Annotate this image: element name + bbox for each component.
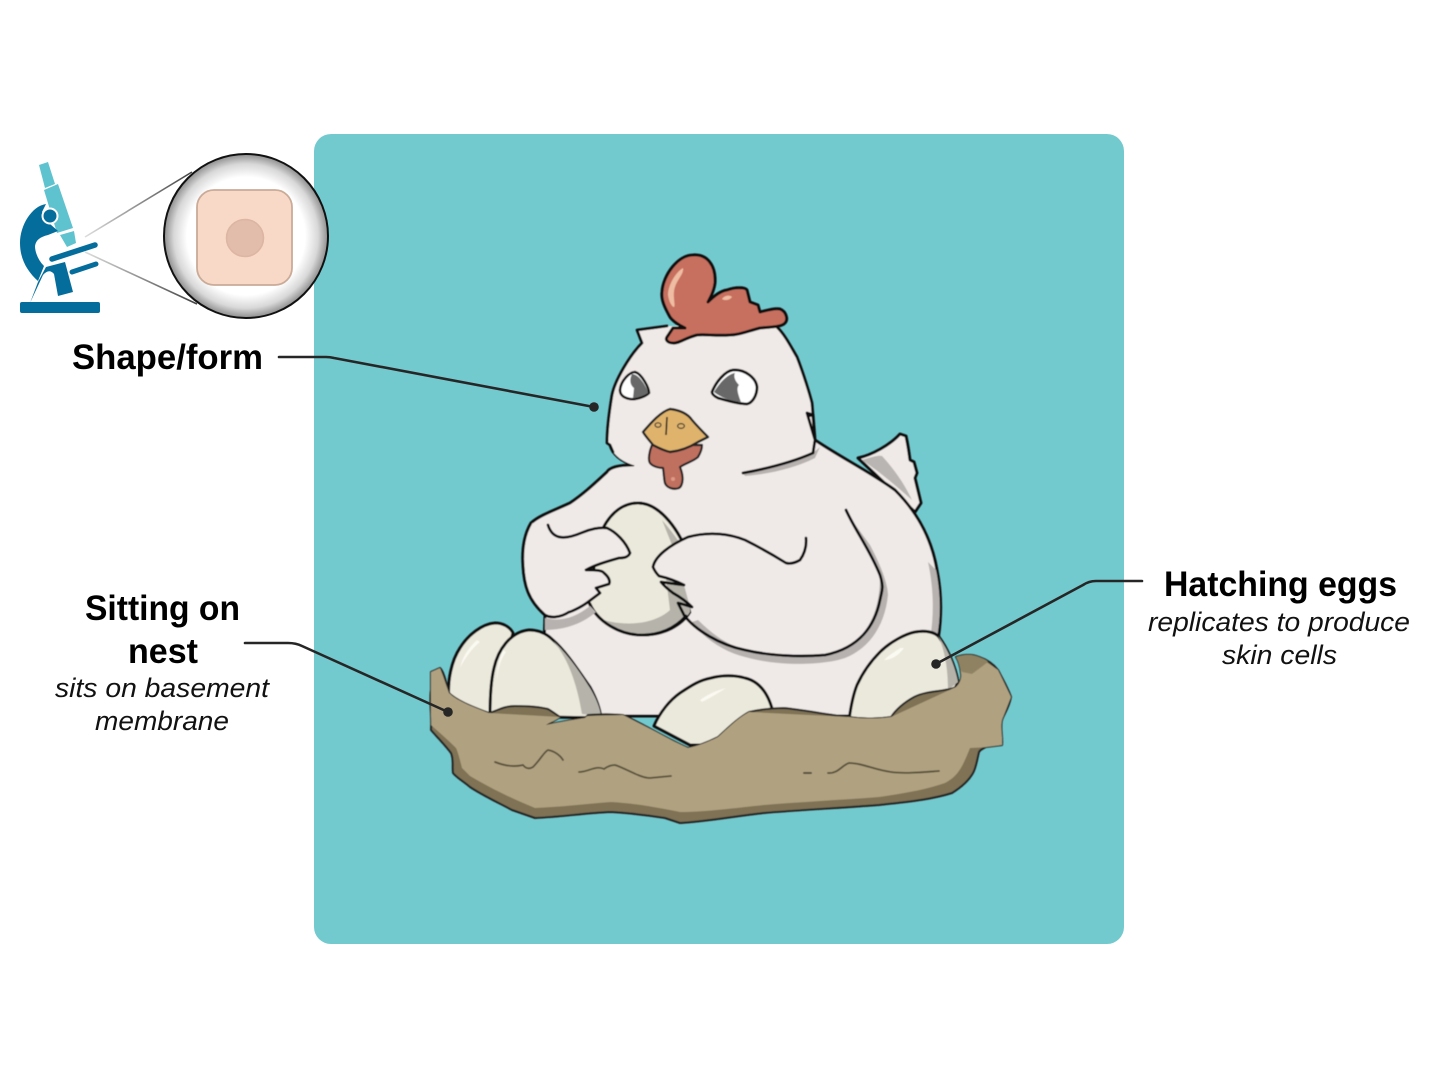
panel: teal background <box>314 134 1124 944</box>
heading: shape/form: Shape/form <box>72 338 263 377</box>
callout: sitting on nest: Sitting on <box>85 589 240 628</box>
wattle <box>649 445 702 489</box>
icon: microscope <box>20 162 100 313</box>
callout: sitting on nest: sits on basement <box>55 673 271 703</box>
callout: sitting on nest: membrane <box>95 706 229 736</box>
nest <box>430 650 1011 823</box>
egg held in wings <box>588 503 690 635</box>
egg: right <box>849 631 958 722</box>
right eye <box>712 370 757 404</box>
callout: sitting on nest <box>55 589 271 736</box>
magnified basal cell <box>164 154 328 318</box>
callout: hatching eggs: Hatching eggs <box>1164 565 1397 604</box>
leader line: hatching eggs <box>931 581 1142 669</box>
illustration: chicken on nest <box>430 255 1011 823</box>
leader line: sitting on nest <box>245 643 453 717</box>
egg: middle <box>654 676 773 745</box>
callout: sitting on nest: nest <box>128 632 198 671</box>
body <box>523 415 941 716</box>
callout: hatching eggs: skin cells <box>1222 640 1337 670</box>
left wing <box>523 523 630 630</box>
comb <box>662 255 787 343</box>
egg: back left <box>449 623 513 715</box>
zoom lines from microscope to lens <box>85 172 197 304</box>
right wing and belly <box>653 510 888 664</box>
leader line: shape/form <box>279 357 599 412</box>
callout: hatching eggs: replicates to produce <box>1148 607 1410 637</box>
head <box>607 326 820 476</box>
nest creases <box>495 750 563 768</box>
callout: hatching eggs <box>1148 565 1410 670</box>
beak <box>643 409 708 452</box>
left eye <box>620 372 649 399</box>
tail <box>858 434 921 512</box>
body shading <box>928 562 940 642</box>
egg: front left <box>490 630 601 718</box>
